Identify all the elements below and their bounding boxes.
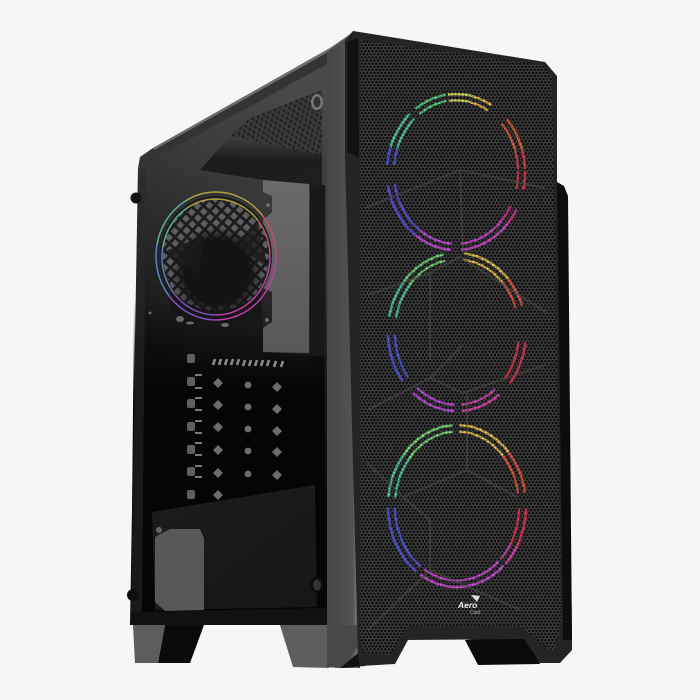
panel: top of case (138, 33, 360, 168)
left foot (133, 625, 204, 663)
logo: AeroCool (457, 595, 480, 616)
glass left frame (131, 168, 146, 612)
standoff blobs column (187, 354, 195, 499)
panel: front pillar (327, 34, 365, 668)
RGB ring: bottom intake fan (388, 425, 526, 587)
logo: AeroCool: Aero (457, 600, 477, 610)
right rear foot (279, 622, 329, 668)
fan mount tabs (148, 203, 270, 327)
screw: bottom left (127, 589, 139, 601)
right channel (310, 185, 325, 610)
inner LED ring (162, 199, 270, 315)
screw: top right (311, 94, 323, 110)
cable slot dashes (195, 374, 202, 478)
interior shadow beam (200, 136, 322, 186)
top vent mesh (230, 90, 322, 155)
lower interior fade (131, 300, 325, 625)
LED glow through mesh (387, 94, 526, 587)
panel: mesh front (360, 40, 562, 655)
mesh perforation overlay (360, 40, 562, 655)
screw: top left (130, 192, 142, 204)
vent slots row (213, 359, 283, 367)
front intake side strip (557, 182, 572, 640)
logo: AeroCool: Cool (470, 610, 480, 616)
screw: bottom right (310, 576, 324, 594)
RGB ring: middle intake fan (388, 253, 526, 411)
PSU shroud (152, 485, 317, 610)
panel: front bezel frame (345, 31, 572, 666)
vents upper bezel (347, 38, 359, 158)
hexagon bezel lines (365, 170, 547, 630)
RGB ring: top intake fan (387, 94, 525, 250)
rear fan (156, 192, 276, 322)
motherboard tray cutout (263, 180, 309, 353)
outer LED ring (156, 192, 276, 320)
PSU window (155, 527, 204, 611)
panel: tempered glass side (130, 64, 327, 625)
front foot (465, 635, 540, 665)
motherboard standoff holes (213, 378, 282, 500)
bottom frame (130, 608, 327, 625)
